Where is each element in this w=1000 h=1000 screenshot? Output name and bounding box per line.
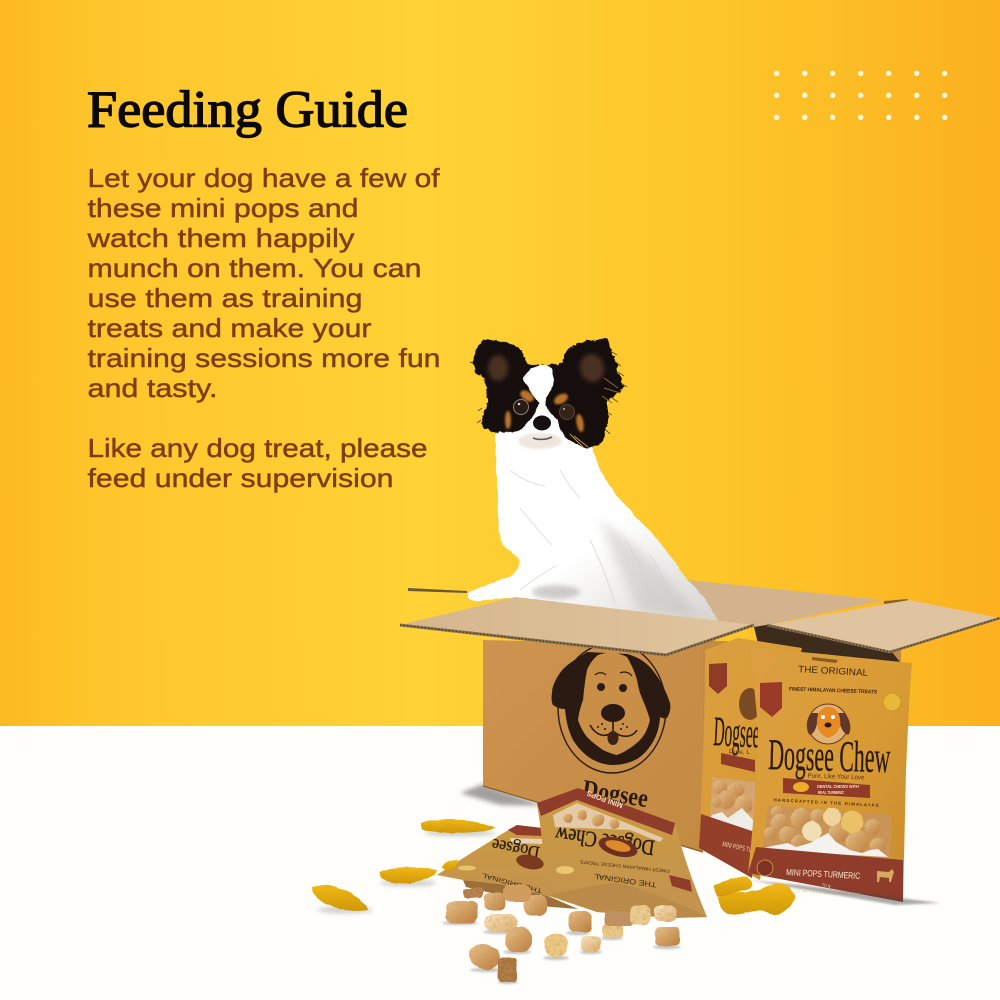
back fallen pouch logo [515,852,545,872]
back fallen pouch brand: Dogsee [490,835,541,863]
fallen pouch red top band [537,788,675,835]
pouch pill text: REAL TURMERIC [818,790,844,795]
logo nose and mouth [590,704,637,745]
back pouch pill [721,753,755,772]
text block: feeding instructions: use them as training [88,283,362,313]
text block: feeding instructions: munch on them. You can [88,253,421,283]
pouch premium seal [757,860,773,876]
fallen pouch logo [596,833,640,861]
fallen pouch ribbon [669,875,692,892]
back fallen pouch window [510,838,543,844]
fallen pouch label: THE ORIGINAL [593,872,657,889]
text block: feeding instructions: training sessions more fun [88,343,440,373]
text block: feeding instructions: watch them happily [86,223,354,253]
fallen pouch mini pops label: MINI POPS [585,789,624,810]
main pouch floor shadow [748,880,940,905]
box dog logo [552,643,670,813]
logo brows [595,672,632,676]
back fallen pouch seal [458,866,476,870]
white floor panel [0,726,1000,1000]
back pouch window [710,777,755,832]
dog eyes [514,400,574,420]
pouch mountain graphic [760,833,888,857]
text block: feeding instructions: these mini pops and [88,193,358,223]
back pouch red ribbon [709,663,727,694]
turmeric root pieces [312,819,496,913]
logo wordmark: Dogsee [580,774,650,813]
box back flaps [408,580,909,628]
box interior shadow [754,625,900,662]
box front flaps [400,597,1000,655]
pouch pill text: DENTAL CHEWS WITH [817,784,859,789]
fallen pouch seal [556,866,574,874]
back fallen pouch inner opening [463,880,578,909]
pouch tab [812,657,838,663]
pouch weight: 70 g [822,883,831,888]
back fallen pouch red top [508,825,543,836]
back pouch logo [739,688,761,720]
dog photo illustration [468,339,718,621]
text block: supervision note: Like any dog treat, please [88,433,428,463]
dog inner ears [488,352,606,384]
back fallen pouch label: THE ORIGINAL [481,871,543,894]
dog body shading [510,470,700,618]
text block: feeding instructions [86,163,440,403]
text block: supervision note: feed under supervision [88,463,394,493]
box shadow on floor [460,784,545,806]
back product pouch [699,638,802,880]
box bottom edge [483,786,703,852]
dog muzzle shading [518,433,562,449]
pouch heading: THE ORIGINAL [798,664,868,679]
pouch dog silhouette [877,869,894,882]
pouch window with chews [760,805,892,858]
front flap [400,597,754,655]
decorative dot grid [774,71,947,120]
pouch gold seal [883,693,901,711]
fallen pouch inner opening [548,883,707,918]
pouch handcrafted line: HANDCRAFTED IN THE HIMALAYAS [774,797,879,808]
fallen pouch tagline: FINEST HIMALAYAN CHEESE TREATS [580,859,670,874]
text block: feeding instructions: treats and make your [88,313,372,343]
text block: feeding instructions: and tasty. [88,373,218,403]
text block: feeding instructions: Let your dog have a few of [88,163,440,193]
pouch ribbon badge [760,682,782,717]
text block: supervision note [88,433,428,493]
fallen pouch window [553,803,663,842]
dog ears and head [472,339,624,448]
dog body [468,430,718,621]
pouch pill text [817,784,859,795]
fallen pouch brand name: Dogsee Chew [553,822,656,861]
scattered cheese chews [446,885,680,982]
pouch red pill [783,778,870,798]
dog nose and mouth [533,416,552,439]
title: Feeding Guide [87,82,408,138]
pouch product name: MINI POPS TURMERIC [786,867,861,881]
pouch protein line: RICH IN CALCIUM & PROTEIN [788,888,860,897]
box front face [483,640,703,852]
pouch subtitle: Pure, Like Your Love [807,773,865,782]
fallen pouch front [537,788,707,918]
pouch pill icon [793,782,809,792]
chew shadows [442,921,681,984]
dog face white markings [497,365,592,462]
logo eyes [597,683,627,692]
back pouch mini pops label: MINI POPS TU [722,841,752,854]
fallen pouch back [437,825,578,909]
back pouch subtitle: Pure, L [729,749,750,756]
pouch dog logo [807,704,850,744]
main product pouch [748,648,912,902]
dog tan markings [505,388,585,432]
back pouch red band [699,814,755,878]
logo dark ring and ears [552,652,670,765]
yellow background panel [0,0,1000,726]
pouch tagline: FINEST HIMALAYAN CHEESE TREATS [789,686,878,696]
turmeric roots right cluster [714,876,794,915]
logo face [578,653,650,755]
back product pouch: Dogsee [712,709,761,757]
dog ear fringe [470,352,627,448]
pouch red band [748,847,903,902]
right flap [767,600,1000,652]
box side panel [700,640,901,852]
